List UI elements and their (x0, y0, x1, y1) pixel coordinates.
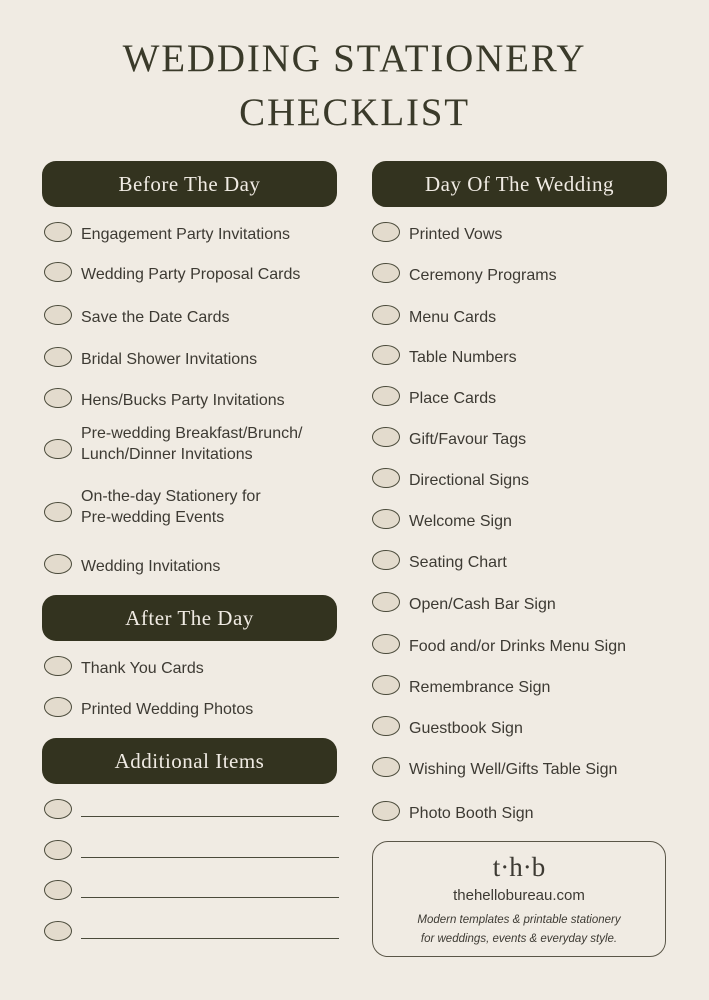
list: day of the wedding: Open/Cash Bar Sign (409, 596, 556, 613)
list: day of the wedding: Gift/Favour Tags (409, 431, 526, 448)
header: additional items (42, 738, 337, 784)
header: additional items: Additional Items (115, 749, 264, 773)
list: after the day: Printed Wedding Photos (81, 701, 253, 718)
list: before the day: Wedding Party Proposal Cards (81, 266, 300, 283)
list: day of the wedding: Table Numbers (409, 349, 517, 366)
header: after the day (42, 595, 337, 641)
list: before the day: Pre-wedding Breakfast/Brunch/ (81, 425, 302, 442)
header: day of the wedding (372, 161, 667, 207)
list: day of the wedding: Welcome Sign (409, 513, 512, 530)
list: day of the wedding: Directional Signs (409, 472, 529, 489)
list: after the day (44, 656, 253, 718)
header: before the day (42, 161, 337, 207)
title (122, 37, 586, 134)
title: CHECKLIST (239, 91, 470, 134)
list: before the day (44, 222, 302, 575)
list: before the day: On-the-day Stationery for (81, 488, 261, 505)
list: after the day: Thank You Cards (81, 660, 204, 677)
brand box (372, 841, 666, 957)
list: day of the wedding: Food and/or Drinks Menu Sign (409, 638, 626, 655)
list: day of the wedding: Printed Vows (409, 226, 502, 243)
list: before the day: Hens/Bucks Party Invitations (81, 392, 285, 409)
list: day of the wedding: Photo Booth Sign (409, 805, 534, 822)
tagline (417, 914, 622, 945)
list: before the day: Bridal Shower Invitations (81, 351, 257, 368)
list: day of the wedding: Seating Chart (409, 554, 507, 571)
list: before the day: Wedding Invitations (81, 558, 220, 575)
list: additional blank lines (44, 799, 339, 941)
list: before the day: Pre-wedding Events (81, 509, 224, 526)
list: before the day: Lunch/Dinner Invitations (81, 446, 253, 463)
list: day of the wedding: Remembrance Sign (409, 679, 550, 696)
tagline: Modern templates & printable stationery (417, 914, 621, 926)
list: day of the wedding: Ceremony Programs (409, 267, 557, 284)
list: day of the wedding: Menu Cards (409, 309, 496, 326)
list: day of the wedding: Place Cards (409, 390, 496, 407)
list: before the day: Engagement Party Invitations (81, 226, 290, 243)
header: day of the wedding: Day Of The Wedding (425, 172, 614, 196)
logo: t·h·b (493, 852, 545, 882)
list: day of the wedding (372, 222, 626, 822)
header: before the day: Before The Day (119, 172, 260, 196)
list: day of the wedding: Guestbook Sign (409, 720, 523, 737)
website: thehellobureau.com (453, 887, 585, 904)
title: WEDDING STATIONERY (123, 37, 586, 80)
list: day of the wedding: Wishing Well/Gifts Table Sign (409, 761, 617, 778)
tagline: for weddings, events & everyday style. (421, 933, 617, 945)
header: after the day: After The Day (125, 606, 254, 630)
list: before the day: Save the Date Cards (81, 309, 230, 326)
